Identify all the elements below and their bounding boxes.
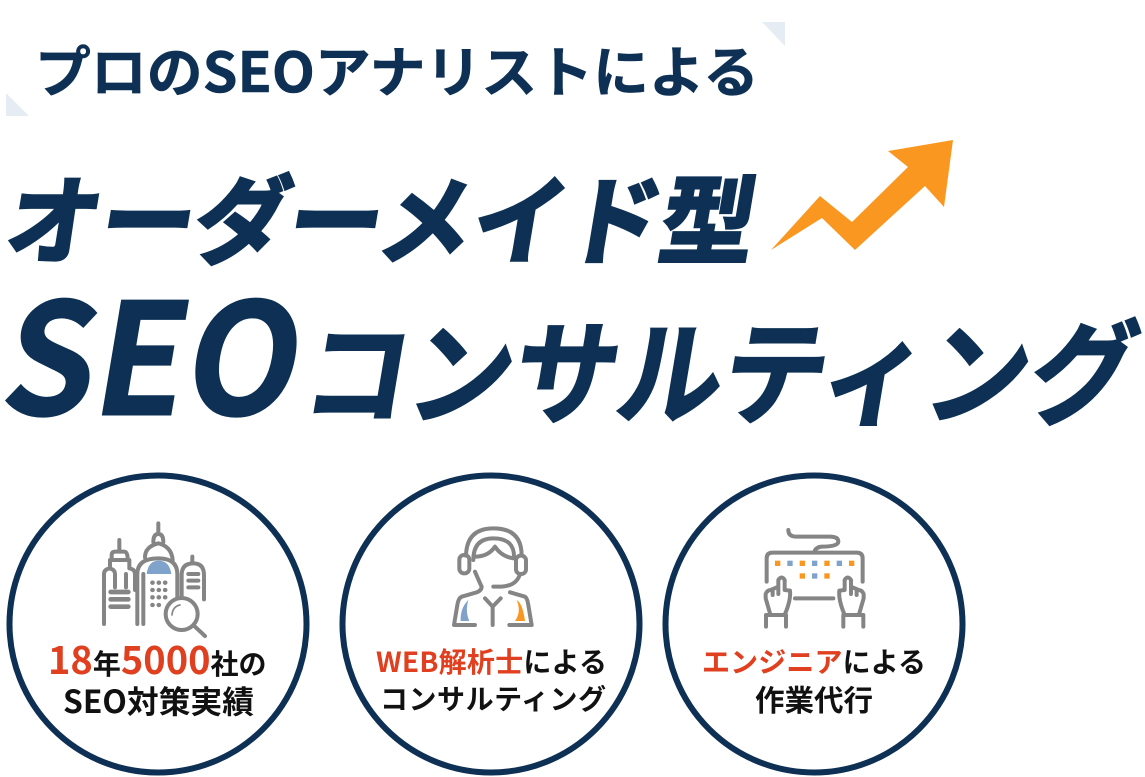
panel: track record [10, 476, 306, 772]
decorative corner: bottom left [6, 93, 29, 116]
icon: rising orange arrow [771, 140, 953, 250]
title line 2 [0, 235, 1145, 460]
subtitle: プロのSEOアナリストによる [35, 28, 759, 108]
text: work on your behalf: 作業代行 [755, 678, 873, 720]
text: web analyst: WEB解析士による [376, 641, 607, 681]
title line 1: オーダーメイド型 [0, 145, 769, 284]
text: consulting: コンサルティング [380, 678, 606, 718]
panel: web analyst consulting [342, 476, 640, 772]
icon: buildings with magnifier [104, 523, 205, 636]
text: 18 years 5000 companies: 18年5000社の [48, 630, 267, 685]
text: engineer: エンジニアによる [702, 641, 926, 681]
icon: headset operator [454, 528, 532, 625]
decorative corner: top right [762, 22, 785, 46]
panel: engineer work [666, 476, 962, 772]
text: SEO track record: SEO対策実績 [63, 677, 254, 723]
icon: keyboard with hands [766, 530, 864, 627]
